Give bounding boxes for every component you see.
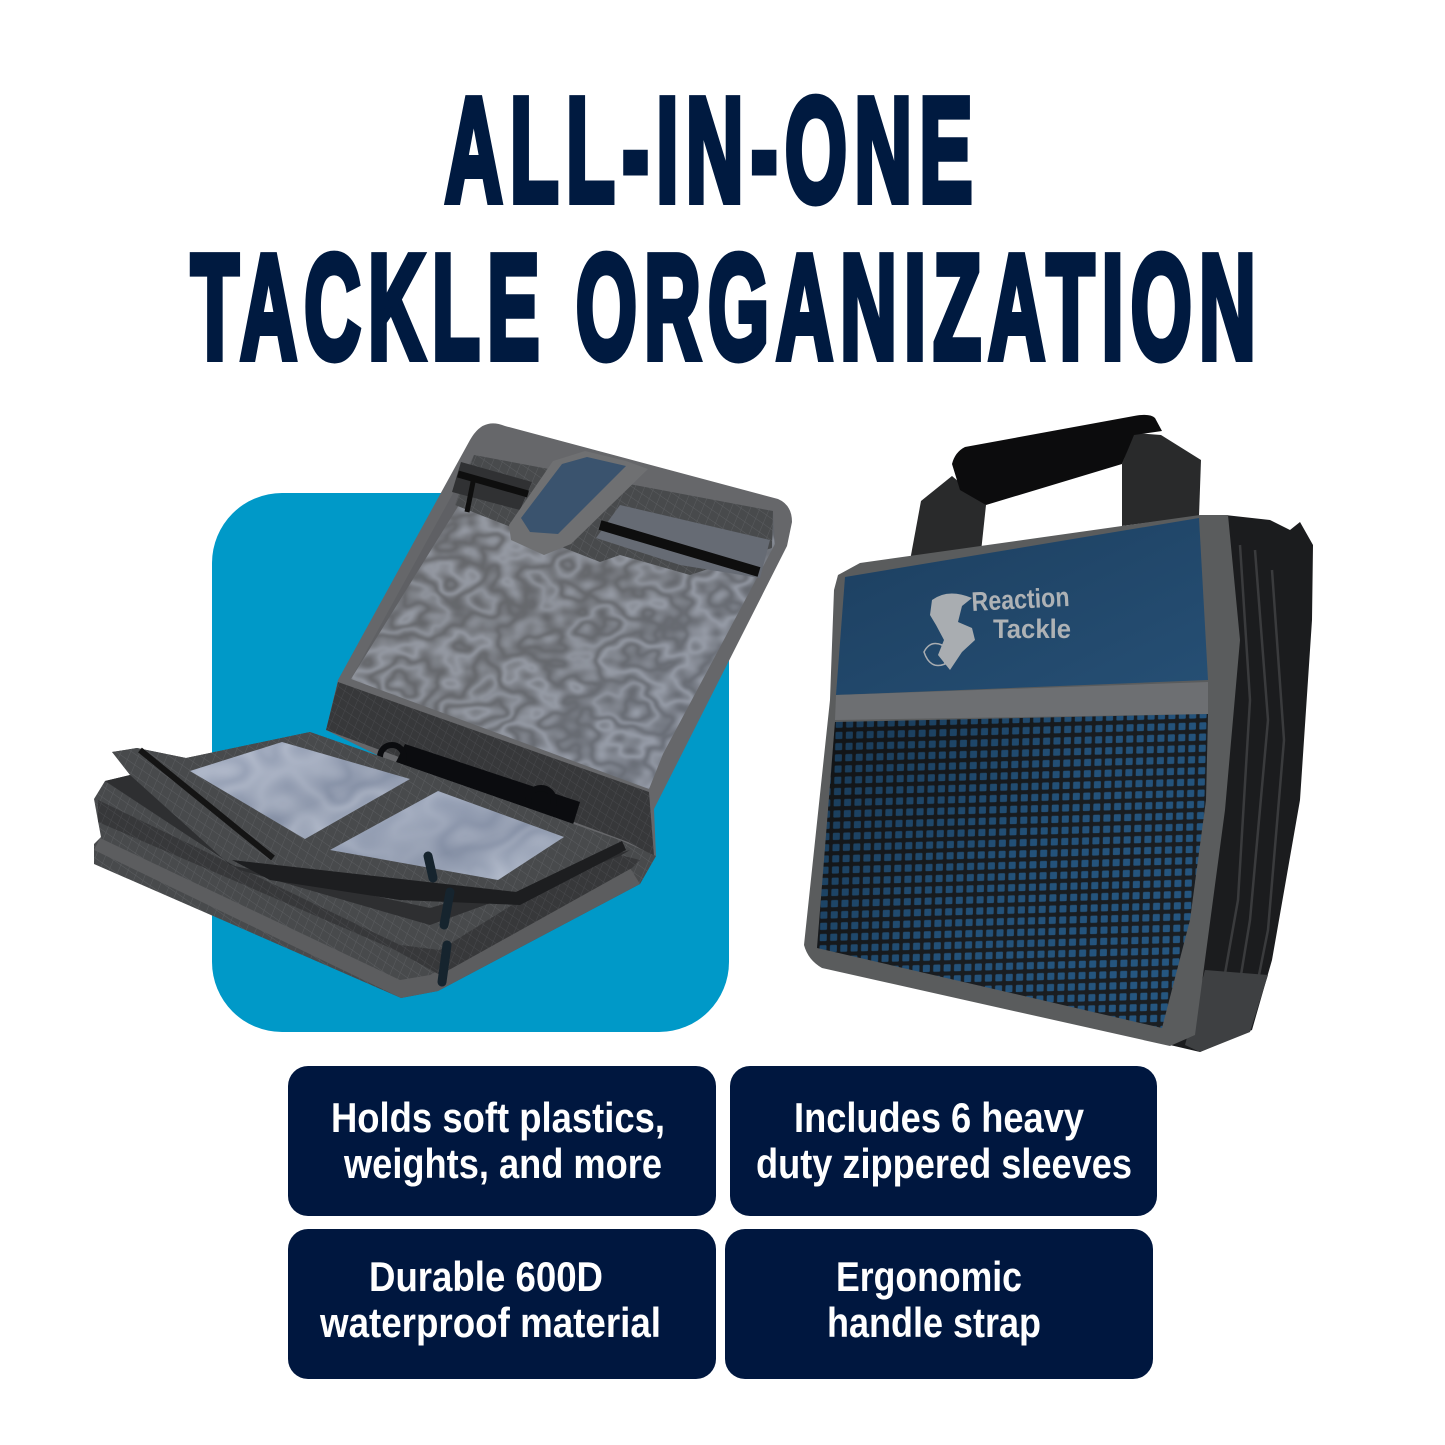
sleeve edge lines: [1215, 545, 1284, 1030]
plastic swirl reflections: [351, 500, 775, 789]
bottom border strip: [94, 838, 640, 998]
sleeve zipper pulls: [428, 856, 450, 982]
window 1: [190, 742, 410, 839]
logo fish: [924, 593, 975, 670]
upper ripstop band behind zippers: [455, 455, 773, 575]
title: [191, 68, 1263, 390]
top zipper left: [452, 462, 532, 510]
mesh pocket: [817, 714, 1208, 1028]
card: waterproof material: [288, 1229, 716, 1379]
open lid with border: [326, 423, 792, 884]
top zipper right: [596, 505, 770, 578]
side folded sleeves: [1170, 515, 1313, 1052]
title line 1: ALL-IN-ONE: [445, 68, 980, 233]
card: handle strap: [725, 1229, 1153, 1379]
zipper pull: [467, 477, 474, 512]
window 2 swirl: [330, 791, 564, 880]
sleeve zipper: [140, 750, 273, 858]
closed tackle binder photo: [804, 415, 1313, 1052]
card: soft plastics: weights, and more: [343, 1140, 662, 1187]
mesh shading: [817, 714, 1208, 1028]
handle strap right: [1122, 433, 1201, 526]
grey pocket band: [835, 682, 1208, 720]
hinge strip: [326, 682, 654, 856]
lower sleeve 2: [105, 775, 630, 925]
sleeve stack silhouette: [94, 732, 656, 998]
velcro flap: [509, 451, 648, 555]
window 2: [330, 791, 564, 880]
card: zippered sleeves: [730, 1066, 1157, 1216]
open tackle binder photo: [94, 423, 792, 998]
window 1 swirl: [190, 742, 410, 839]
blue background panel: [212, 493, 729, 1032]
top sleeve: [112, 732, 622, 892]
card: handle strap: Ergonomic: [836, 1253, 1022, 1300]
card: soft plastics: [288, 1066, 716, 1216]
card: soft plastics: Holds soft plastics,: [331, 1094, 665, 1141]
logo: [924, 582, 1071, 670]
card: waterproof material: waterproof material: [319, 1299, 661, 1346]
card: zippered sleeves: Includes 6 heavy: [794, 1094, 1085, 1141]
handle foam grip: [952, 415, 1162, 505]
lower sleeve 3: [98, 800, 640, 975]
card: waterproof material: Durable 600D: [369, 1253, 603, 1300]
front face border: [804, 515, 1240, 1046]
handle strap left: [909, 476, 986, 566]
dark band under top sleeve: [232, 841, 626, 905]
logo text reaction: Reaction: [971, 582, 1070, 617]
feature cards: [288, 1066, 1157, 1379]
card: zippered sleeves: duty zippered sleeves: [756, 1140, 1132, 1187]
navy upper panel: [836, 518, 1208, 695]
card: handle strap: handle strap: [827, 1299, 1041, 1346]
lower sleeve fabric: [1185, 970, 1268, 1052]
binder rod: [380, 744, 580, 828]
logo text tackle: Tackle: [993, 614, 1071, 644]
clear plastic lid window: [351, 455, 775, 789]
